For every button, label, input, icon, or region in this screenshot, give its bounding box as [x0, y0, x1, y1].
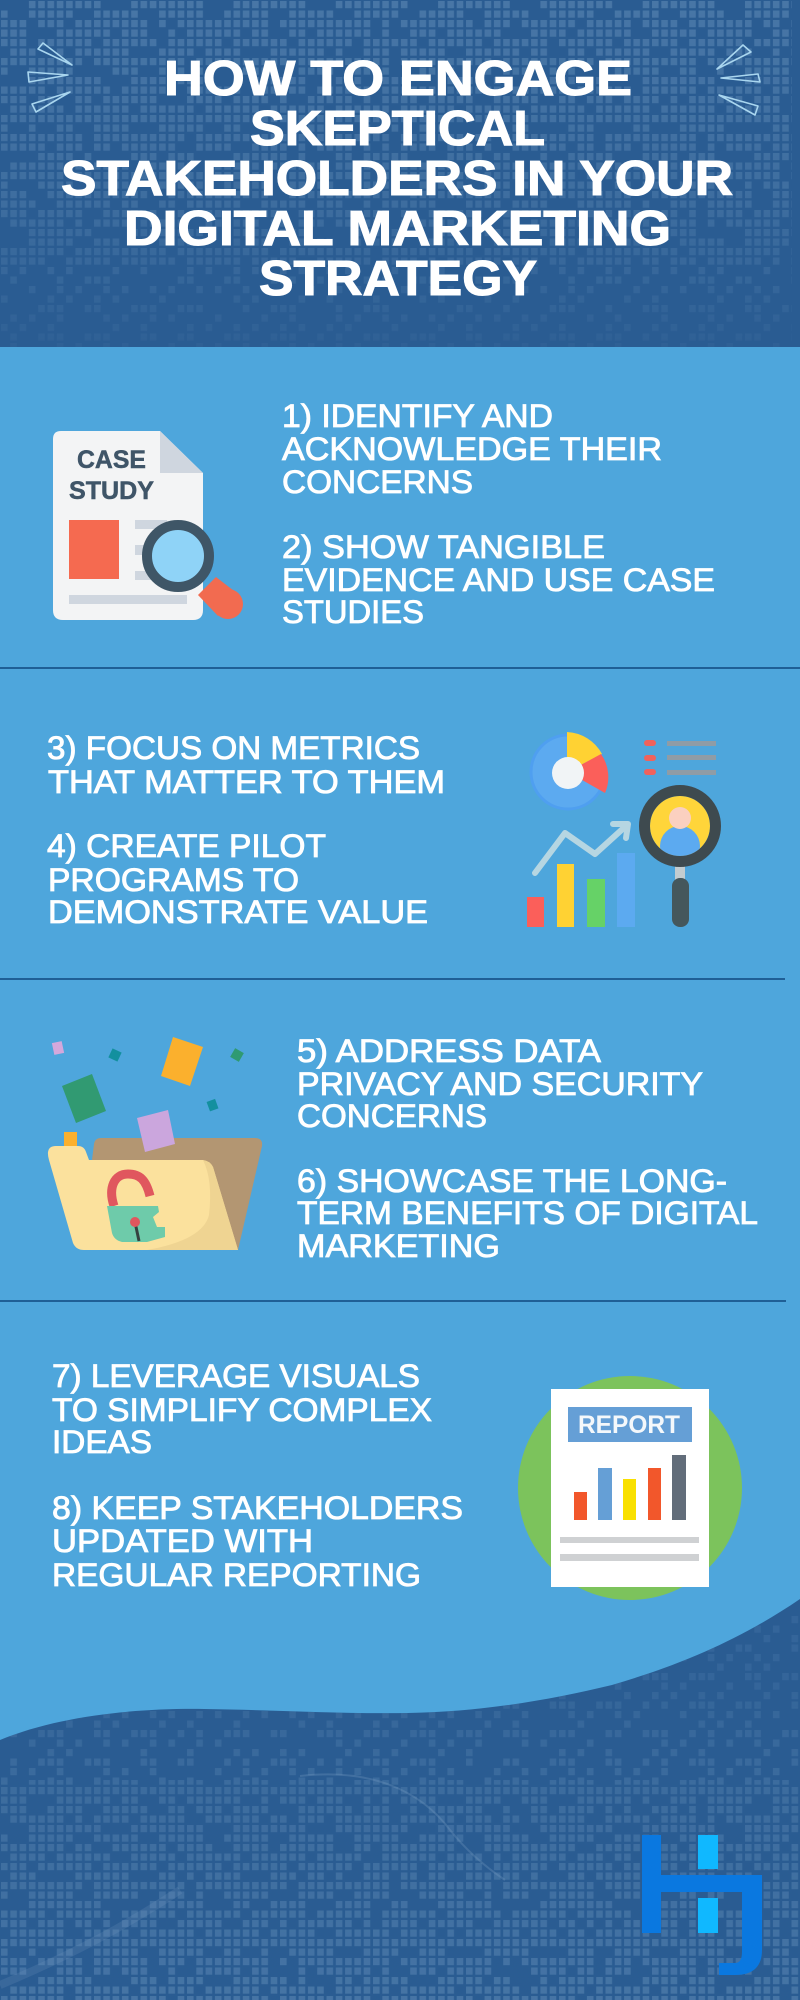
text block: items 1 and 2: CONCERNS	[282, 464, 473, 500]
icon: case study document with magnifier: CASE	[77, 446, 146, 474]
text block: items 5 and 6: 6) SHOWCASE THE LONG-	[297, 1163, 727, 1199]
text block: items 1 and 2: STUDIES	[282, 594, 424, 630]
title: STRATEGY	[259, 252, 537, 306]
pie chart	[531, 732, 608, 809]
text block: items 5 and 6: CONCERNS	[297, 1098, 487, 1134]
title: SKEPTICAL	[250, 102, 545, 156]
footer wave	[0, 1590, 800, 2000]
folder back	[92, 1138, 262, 1250]
title: HOW TO ENGAGE	[164, 52, 632, 106]
text block: items 3 and 4: 4) CREATE PILOT	[47, 828, 326, 864]
title: DIGITAL MARKETING	[124, 202, 671, 256]
icon: analytics charts with magnifier	[527, 732, 716, 927]
text block: items 3 and 4: PROGRAMS TO	[48, 862, 299, 898]
folder front	[48, 1146, 238, 1250]
icon: report document on green circle: REPORT	[578, 1411, 680, 1439]
text block: items 5 and 6: PRIVACY AND SECURITY	[297, 1066, 703, 1102]
text block: items 5 and 6: MARKETING	[297, 1228, 500, 1264]
trend arrow	[535, 824, 628, 873]
icon: case study document with magnifier: STUDY	[69, 477, 154, 505]
text block: items 5 and 6: TERM BENEFITS OF DIGITAL	[297, 1195, 758, 1231]
text block: items 1 and 2	[282, 398, 715, 630]
decorative sparks right	[717, 45, 760, 115]
text block: items 3 and 4: THAT MATTER TO THEM	[48, 764, 445, 800]
magnifier with person	[644, 790, 716, 927]
text block: items 7 and 8: IDEAS	[52, 1424, 152, 1460]
logo	[642, 1835, 762, 1975]
text block: items 7 and 8: REGULAR REPORTING	[52, 1557, 421, 1593]
text block: items 7 and 8	[52, 1358, 463, 1593]
flying papers	[52, 1037, 244, 1148]
text block: items 7 and 8: UPDATED WITH	[52, 1523, 313, 1559]
text block: items 1 and 2: EVIDENCE AND USE CASE	[282, 562, 715, 598]
title: STAKEHOLDERS IN YOUR	[61, 152, 733, 206]
title	[61, 52, 733, 306]
header band	[0, 0, 800, 347]
bar chart	[527, 853, 635, 927]
text block: items 3 and 4	[47, 730, 445, 930]
text block: items 1 and 2: 1) IDENTIFY AND	[282, 398, 553, 434]
lilac paper	[137, 1110, 175, 1152]
text block: items 1 and 2: 2) SHOW TANGIBLE	[282, 529, 605, 565]
text block: items 3 and 4: 3) FOCUS ON METRICS	[47, 730, 420, 766]
legend list	[644, 740, 716, 775]
icon: open folder with unlocked padlock	[48, 1037, 262, 1250]
text block: items 3 and 4: DEMONSTRATE VALUE	[48, 894, 428, 930]
icon: case study document with magnifier	[53, 431, 243, 620]
icon: report document on green circle	[518, 1376, 742, 1600]
decorative sparks left	[28, 43, 72, 112]
text block: items 5 and 6	[297, 1033, 758, 1264]
text block: items 7 and 8: 7) LEVERAGE VISUALS	[52, 1358, 420, 1394]
text block: items 1 and 2: ACKNOWLEDGE THEIR	[282, 431, 662, 467]
padlock	[107, 1174, 165, 1242]
text block: items 7 and 8: TO SIMPLIFY COMPLEX	[52, 1392, 432, 1428]
text block: items 5 and 6: 5) ADDRESS DATA	[297, 1033, 601, 1069]
text block: items 7 and 8: 8) KEEP STAKEHOLDERS	[52, 1490, 463, 1526]
